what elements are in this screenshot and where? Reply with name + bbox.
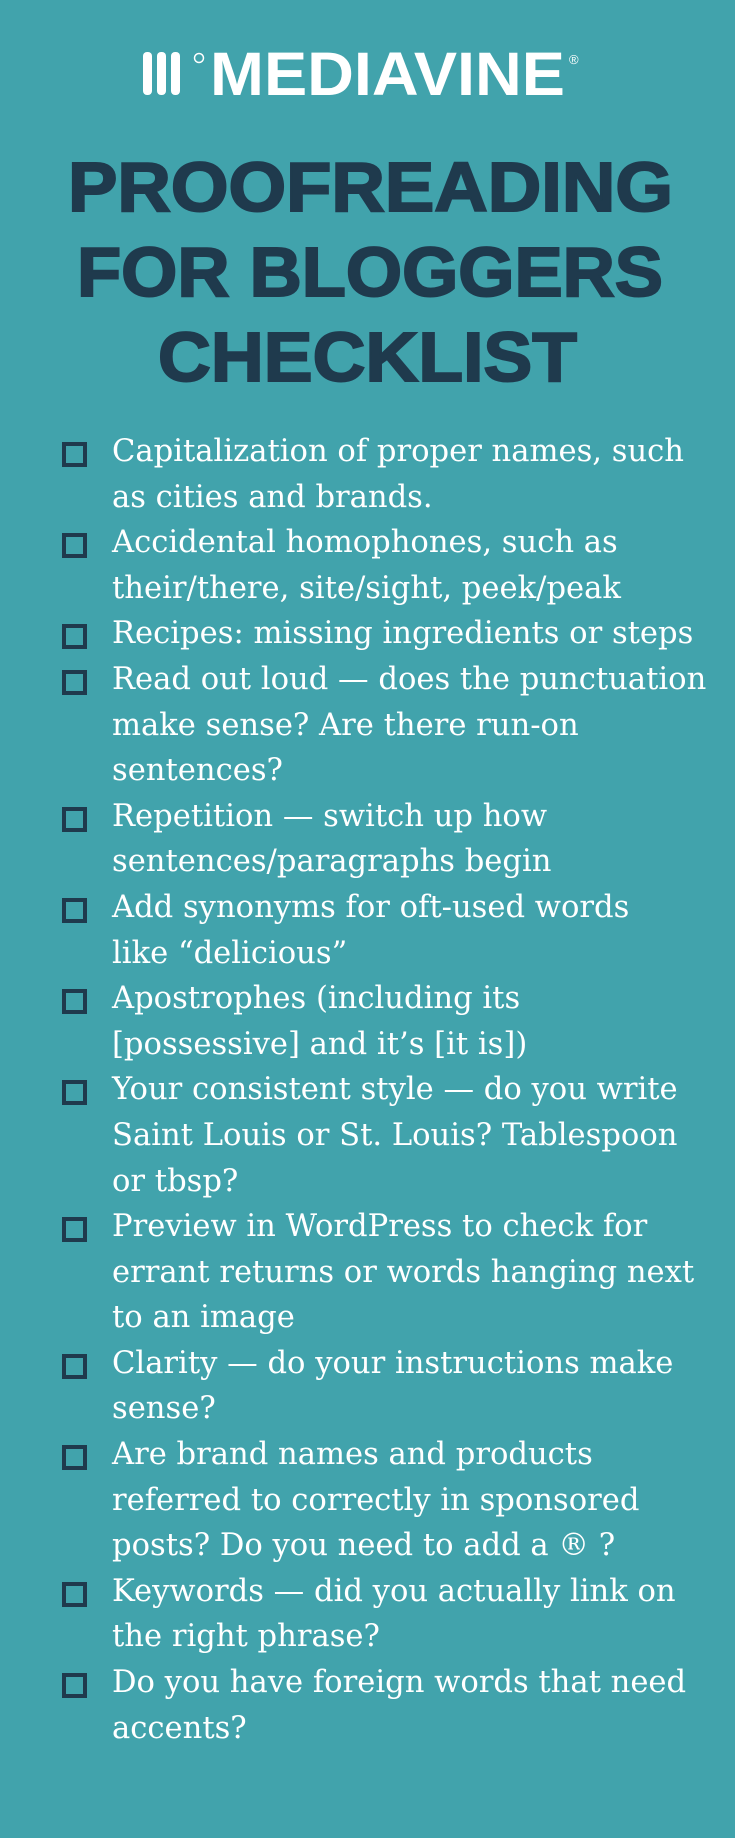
icon: logo mark [143, 52, 204, 95]
item 9: to an image [112, 1300, 295, 1335]
item 10: sense? [112, 1391, 216, 1426]
item 1: Capitalization of proper names, such [112, 434, 684, 469]
item 5: sentences/paragraphs begin [112, 844, 551, 879]
item 11: posts? Do you need to add a ® ? [112, 1528, 615, 1563]
item 13: accents? [112, 1711, 247, 1746]
item 4: sentences? [112, 753, 283, 788]
item 12 [62, 1574, 676, 1654]
logo text: MEDIAVINE [210, 40, 565, 108]
item 5 [62, 799, 551, 879]
item 11: referred to correctly in sponsored [112, 1483, 639, 1518]
logo: ® [569, 52, 579, 67]
item 8: Your consistent style — do you write [112, 1072, 678, 1107]
item 2: their/there, site/sight, peek/peak [112, 571, 621, 606]
title: CHECKLIST [158, 318, 577, 396]
item 6: like “delicious” [112, 936, 347, 971]
item 1 [62, 434, 684, 515]
item 9: errant returns or words hanging next [112, 1255, 694, 1290]
item 9: Preview in WordPress to check for [112, 1209, 647, 1244]
title: PROOFREADING [68, 148, 673, 226]
item 4: make sense? Are there run-on [112, 708, 579, 743]
item 6 [62, 890, 629, 971]
title [68, 148, 673, 396]
item 12: the right phrase? [112, 1619, 380, 1654]
checklist [62, 434, 706, 1746]
item 4 [62, 662, 706, 788]
item 2: Accidental homophones, such as [112, 525, 618, 560]
item 11 [62, 1437, 639, 1563]
item 1: as cities and brands. [112, 480, 433, 515]
item 8: or tbsp? [112, 1164, 238, 1198]
item 8 [62, 1072, 678, 1198]
title: FOR BLOGGERS [77, 233, 663, 311]
item 13: Do you have foreign words that need [112, 1665, 686, 1700]
item 12: Keywords — did you actually link on [112, 1574, 676, 1609]
item 4: Read out loud — does the punctuation [112, 662, 706, 697]
item 8: Saint Louis or St. Louis? Tablespoon [112, 1118, 677, 1153]
item 9 [62, 1209, 694, 1335]
item 10 [62, 1346, 673, 1426]
item 7: Apostrophes (including its [112, 981, 520, 1016]
item 5: Repetition — switch up how [112, 799, 547, 834]
item 6: Add synonyms for oft-used words [112, 890, 629, 925]
item 13 [62, 1665, 686, 1746]
item 10: Clarity — do your instructions make [112, 1346, 673, 1381]
item 7: [possessive] and it’s [it is]) [112, 1027, 527, 1062]
logo [143, 40, 579, 108]
item 2 [62, 525, 622, 606]
item 3: Recipes: missing ingredients or steps [112, 616, 693, 651]
item 7 [62, 981, 527, 1062]
item 11: Are brand names and products [112, 1437, 593, 1472]
